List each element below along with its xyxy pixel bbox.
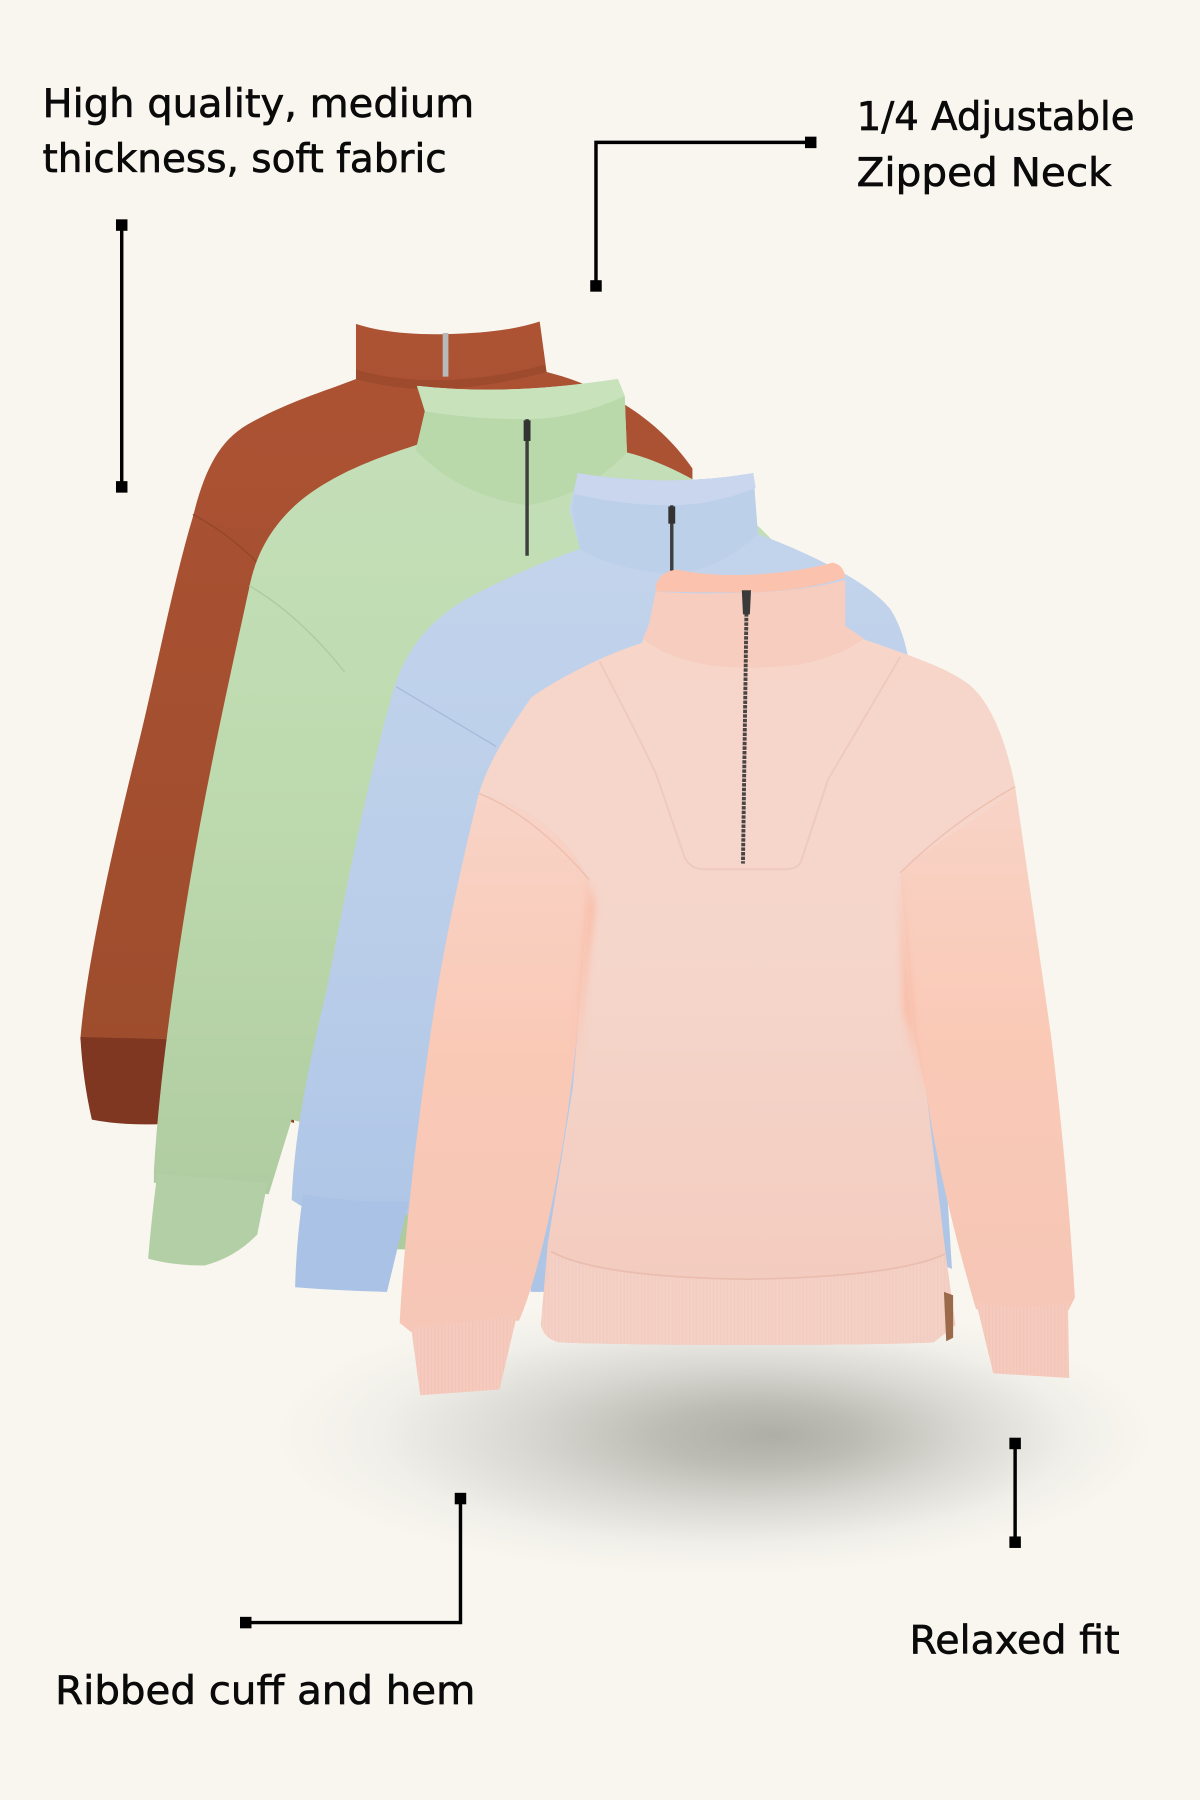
pink torso [479,625,1015,1345]
fabric text line 1: High quality, medium [42,81,474,127]
pink hem seam [551,1252,945,1279]
pink underarm shading [573,873,927,1096]
blue shoulder seam [396,687,496,746]
brown body and sleeve [80,322,692,1102]
green zipper pull [524,420,531,441]
connector: relaxed fit [1009,1438,1021,1548]
sweatshirt: brown [80,322,692,1124]
green shoulder seam [249,586,344,672]
pink collar inner [656,563,845,593]
blue body and sleeve [292,473,952,1292]
pink hem band [541,1252,955,1345]
pink shoulder seams [479,787,1015,880]
brown collar shade [356,365,547,389]
callout: ribbed cuff label: Ribbed cuff and hem [55,1668,475,1714]
green collar [416,379,627,505]
pink zipper pull [742,590,751,614]
neck text line 1: 1/4 Adjustable [857,94,1135,140]
brown body sliver [285,1079,296,1123]
blue collar inner [574,473,756,505]
brown shoulder seam [193,514,260,565]
green cuff [148,1174,268,1265]
floor shadow [270,1295,1154,1576]
blue cuff [295,1194,409,1292]
blue zipper [670,505,673,572]
green body and sleeve [154,379,804,1249]
pink right sleeve [900,787,1075,1311]
callout: relaxed fit label: Relaxed fit [909,1618,1120,1664]
connector: zipped neck [590,137,816,292]
green collar inner [418,379,625,419]
callout: fabric label [42,81,474,182]
pink cuff ribbing [411,1302,1069,1395]
brown zipper [443,333,448,377]
pink left cuff [411,1316,517,1395]
brown cuff [80,1037,168,1124]
pink hem ribbing [541,1252,955,1345]
connector: fabric [116,219,127,493]
pink collar [643,580,864,668]
green zipper [526,419,529,556]
connector: ribbed cuff [240,1493,466,1628]
pink yoke seam [599,657,900,869]
pink left sleeve [400,793,589,1332]
sweatshirt: green [148,379,804,1265]
blue collar [572,473,758,574]
pink zipper [743,613,746,864]
blue zipper pull [668,506,675,524]
neck text line 2: Zipped Neck [857,150,1112,196]
pink right cuff [976,1302,1069,1378]
sweatshirt: pink [400,563,1075,1395]
sweatshirt: blue [292,473,952,1292]
fabric text line 2: thickness, soft fabric [42,136,447,182]
callout: zipped neck label [857,94,1135,196]
hem label tag [944,1292,953,1341]
